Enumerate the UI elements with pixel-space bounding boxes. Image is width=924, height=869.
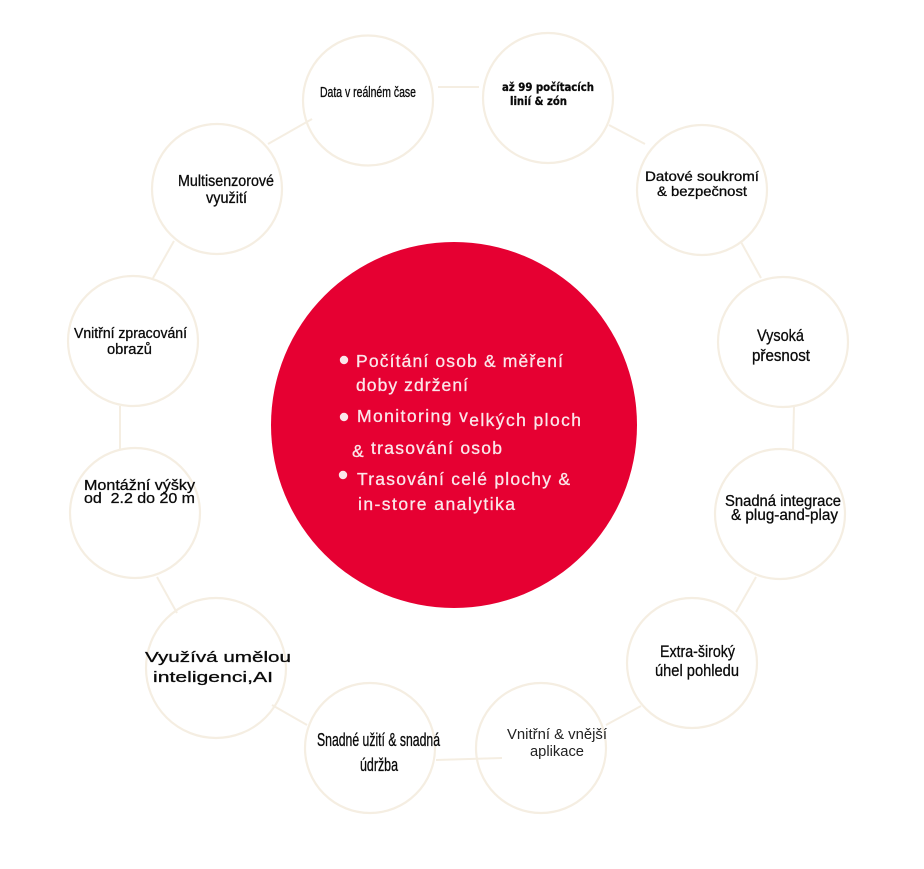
- node: up to 99 counting lines: až 99 počítacích: [502, 80, 594, 94]
- node: easy integration: & plug-and-play: [731, 507, 838, 524]
- connector ring: [120, 87, 794, 760]
- central bullet list: [339, 351, 581, 514]
- node: indoor and outdoor: aplikace: [530, 744, 584, 760]
- node: image processing: [68, 276, 198, 406]
- node: data privacy: Datové soukromí: [645, 168, 759, 184]
- node: high accuracy: Vysoká: [757, 326, 804, 345]
- bullet 1 text line 2: doby zdržení: [356, 375, 468, 395]
- bullet 2 text line 2: &: [352, 441, 364, 461]
- node: indoor and outdoor: Vnitřní & vnější: [507, 727, 607, 743]
- node: multisensor: [152, 124, 282, 254]
- node: artificial intelligence: inteligenci,AI: [153, 669, 273, 686]
- bullet 3 text line 1: Trasování celé plochy &: [357, 469, 570, 489]
- node: high accuracy: [718, 277, 848, 407]
- central red circle: [271, 242, 637, 608]
- node: data privacy: & bezpečnost: [657, 183, 747, 199]
- node: wide angle: Extra-široký: [660, 642, 735, 661]
- node: high accuracy: přesnost: [752, 346, 810, 365]
- node: real-time data: Data v reálném čase: [320, 84, 416, 101]
- node: easy integration: Snadná integrace: [725, 493, 841, 510]
- bullet 1 text line 1: Počítání osob & měření: [356, 351, 563, 371]
- bullet 2 text line 1: elkých ploch: [469, 410, 581, 430]
- node: multisensor: Multisenzorové: [178, 173, 274, 190]
- node: multisensor: využití: [206, 190, 248, 207]
- node: easy use: Snadné užití & snadná: [317, 730, 441, 750]
- node: mounting height: [70, 448, 200, 578]
- bullet 2 text line 2: trasování osob: [365, 438, 502, 458]
- node: mounting height: Montážní výšky: [84, 477, 196, 494]
- node: image processing: obrazů: [107, 341, 152, 358]
- bullet 1: [340, 356, 348, 364]
- node: artificial intelligence: Využívá umělou: [145, 649, 291, 666]
- bullet 2 text line 1: Monitoring v: [357, 406, 468, 426]
- node: wide angle: [627, 598, 757, 728]
- node: image processing: Vnitřní zpracování: [74, 325, 188, 342]
- node: real-time data: [303, 36, 433, 166]
- node: easy use: [305, 683, 441, 813]
- node: artificial intelligence: [145, 598, 291, 738]
- node: data privacy: [637, 125, 767, 255]
- node: wide angle: úhel pohledu: [655, 661, 739, 680]
- node: up to 99 counting lines: [483, 33, 613, 163]
- node: up to 99 counting lines: linií & zón: [510, 94, 567, 108]
- node: easy use: údržba: [360, 755, 399, 775]
- node: indoor and outdoor: [476, 683, 607, 813]
- node: easy integration: [715, 449, 845, 579]
- bullet 2: [340, 413, 348, 421]
- bullet 3 text line 2: in-store analytika: [358, 494, 515, 514]
- bullet 3: [339, 471, 347, 479]
- node: mounting height: od 2.2 do 20 m: [84, 490, 195, 507]
